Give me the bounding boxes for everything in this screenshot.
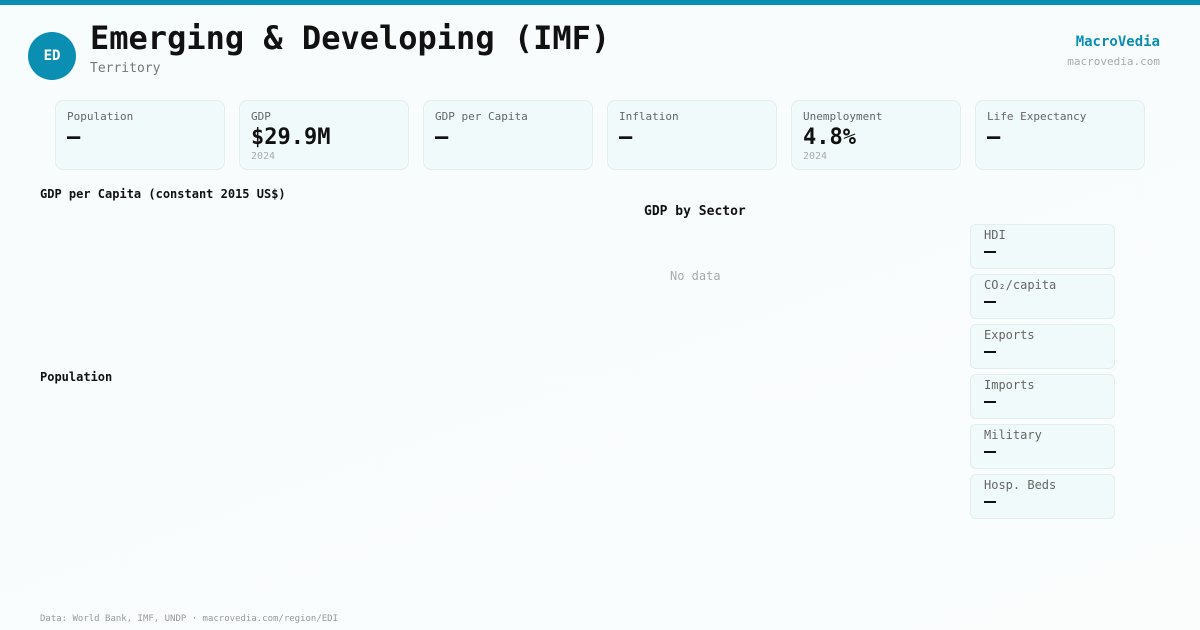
stat card: gdp per capita	[423, 100, 593, 170]
subtitle: Territory	[90, 61, 160, 76]
side card: military	[970, 424, 1115, 469]
side card: military: Military	[984, 428, 1042, 442]
top bar	[0, 0, 1200, 5]
stat card: gdp: $29.9M	[251, 125, 330, 150]
side card: hdi: HDI	[984, 228, 1006, 242]
stat card: gdp per capita: GDP per Capita	[435, 110, 528, 123]
stat card: population	[55, 100, 225, 170]
stat card: gdp	[239, 100, 409, 170]
side card: hospital beds: Hosp. Beds	[984, 478, 1056, 492]
chart heading: gdp by sector: GDP by Sector	[644, 204, 746, 219]
footer source: Data: World Bank, IMF, UNDP · macrovedia.com/region/EDI	[40, 614, 338, 624]
side card: imports	[970, 374, 1115, 419]
stat card: unemployment: Unemployment	[803, 110, 882, 123]
stat card: life expectancy: Life Expectancy	[987, 110, 1086, 123]
no data message: No data	[670, 269, 721, 283]
side card: exports: Exports	[984, 328, 1035, 342]
side card: exports	[970, 324, 1115, 369]
stat card: inflation: Inflation	[619, 110, 679, 123]
side card: imports: Imports	[984, 378, 1035, 392]
stat card: gdp per capita: —	[435, 125, 448, 150]
side card: hdi	[970, 224, 1115, 269]
stat card: gdp: 2024	[251, 151, 275, 162]
brand url: macrovedia.com	[1067, 55, 1160, 68]
chart heading: population: Population	[40, 370, 112, 384]
stat card: unemployment: 2024	[803, 151, 827, 162]
logo badge	[28, 32, 76, 80]
side card: co2: CO₂/capita	[984, 278, 1056, 292]
brand: MacroVedia	[1076, 34, 1160, 50]
side card: hospital beds	[970, 474, 1115, 519]
stat card: unemployment: 4.8%	[803, 125, 856, 150]
stat card: inflation	[607, 100, 777, 170]
stat card: inflation: —	[619, 125, 632, 150]
stat card: population: —	[67, 125, 80, 150]
side card: co2	[970, 274, 1115, 319]
stat card: life expectancy	[975, 100, 1145, 170]
stat card: gdp: GDP	[251, 110, 271, 123]
stat card: life expectancy: —	[987, 125, 1000, 150]
stat card: population: Population	[67, 110, 133, 123]
logo badge: ED	[44, 48, 60, 64]
stat card: unemployment	[791, 100, 961, 170]
title: Emerging & Developing (IMF)	[90, 19, 610, 57]
chart heading: gdp per capita: GDP per Capita (constant 2015 US$)	[40, 187, 286, 201]
